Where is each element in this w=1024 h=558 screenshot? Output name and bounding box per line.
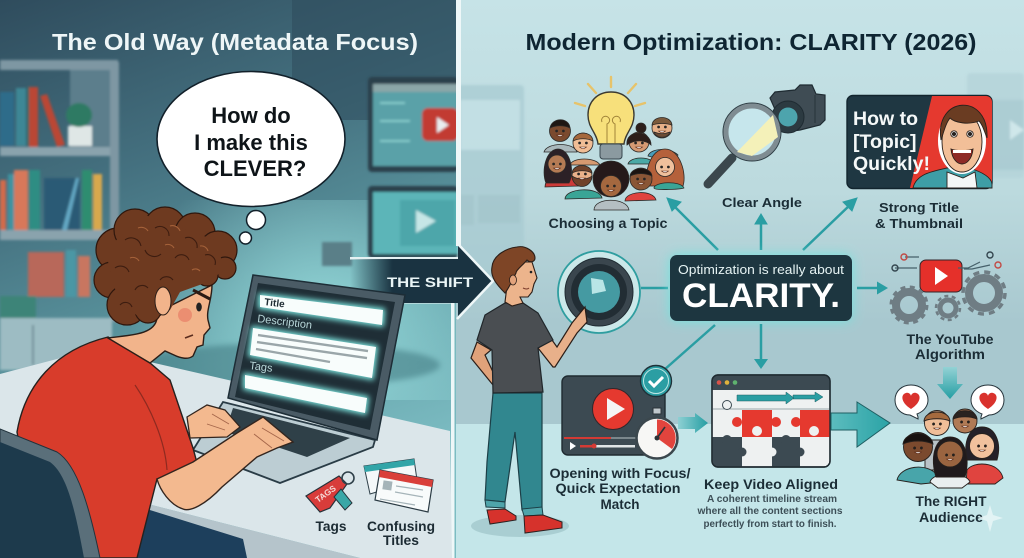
label: opening: Match [600,497,640,512]
neck and face [108,285,212,363]
description: keep video aligned: A coherent timeline stream [707,494,837,505]
back hand [187,405,240,438]
back arm [471,342,493,385]
label: clear angle: Clear Angle [722,195,802,210]
label: strong title and thumbnail: Strong Title [879,200,959,215]
divider and shift arrow [350,0,493,558]
connector: to opening [664,325,715,370]
thumbnail card [847,96,992,188]
icon: lightbulb with team [544,77,684,210]
icon: laptop [193,275,405,483]
bookshelf [0,60,119,370]
icon: confusing titles [364,459,433,512]
video player card [562,366,678,458]
front arm [538,307,587,367]
ear [155,287,171,315]
label: tags: Tags [316,519,346,534]
bubble text: I make this [194,130,308,155]
hair [492,247,535,293]
flow arrows [737,392,823,404]
field: tags [245,375,367,413]
label: opening: Quick Expectation [556,481,680,496]
wall monitors [322,77,458,266]
thumbnail text: How to [853,108,918,130]
cuffs [485,500,543,516]
front arm and hand [157,417,293,510]
description: keep video aligned: perfectly from start to finish. [704,519,837,530]
connector: lens to box [641,287,668,289]
chair [0,429,100,558]
label: algorithm: Algorithm [915,347,985,362]
label: the shift: THE SHIFT [387,274,474,290]
check badge [640,366,672,396]
callout word: CLARITY. [682,277,840,315]
arrow: algorithm to audience [937,367,963,399]
big arrow [831,402,890,447]
thumbnail face [913,105,992,188]
field: title [260,295,383,325]
label: keep video aligned: Keep Video Aligned [704,476,838,492]
callout: clarity [670,255,852,321]
label: right audience: The RIGHT [916,494,987,509]
title: modern optimization: Modern Optimization: CLARITY (2026) [526,29,976,55]
label: opening: Opening with Focus/ [550,466,691,481]
puzzle window [712,375,830,467]
label: algorithm: The YouTube [906,332,994,347]
thumbnail text: Quickly! [853,153,930,175]
thumbnail text: [Topic] [853,131,917,153]
panel: right background [456,0,1024,558]
arrow: to video aligned [754,324,768,369]
bubble text: How do [211,103,291,128]
arrow: to angle [755,214,767,250]
curly hair [94,207,237,325]
arrow: opening to aligned [678,413,708,433]
neck and face [505,262,537,306]
person: frustrated creator [0,207,293,558]
icon: audience [895,385,1004,488]
shirt [17,337,197,558]
person: creator with lens [471,247,587,537]
label: description: Description [257,313,313,332]
gears [891,272,1005,323]
desk [0,345,452,558]
icon: algorithm [891,252,1005,323]
pants [123,506,247,558]
arrow: to topic [667,198,718,250]
stopwatch [636,408,678,458]
callout lead: Optimization is really about [678,263,845,277]
team [544,118,684,210]
icon: tags: TAGS [313,483,338,505]
field: description [250,328,376,378]
arrow: to algorithm [857,282,888,294]
bubble text: CLEVER? [204,156,306,181]
icon: tags [306,472,354,512]
label: right audience: Audience [919,510,984,525]
puzzle pieces [742,410,772,437]
description: keep video aligned: where all the content sections [696,506,843,517]
heart bubbles [895,385,928,419]
dark row [712,437,742,467]
thought bubble [157,72,345,244]
shoes [487,509,516,524]
icon: magnifier over camera [708,85,825,184]
label: title: Title [264,297,286,311]
play button [592,388,634,430]
arrow: to thumbnail [803,198,857,250]
panel: old way background [0,0,458,558]
label: tags: Tags [249,360,274,375]
label: confusing titles: Confusing [367,519,435,534]
title: old way: The Old Way (Metadata Focus) [52,29,418,55]
people [897,409,1003,488]
shirt [477,303,553,393]
sparkle [978,505,1003,532]
label: strong title and thumbnail: & Thumbnail [875,216,963,231]
icon: lens [558,251,640,333]
label: confusing titles: Titles [383,533,419,548]
label: choosing a topic: Choosing a Topic [548,216,668,231]
jeans [485,393,542,510]
